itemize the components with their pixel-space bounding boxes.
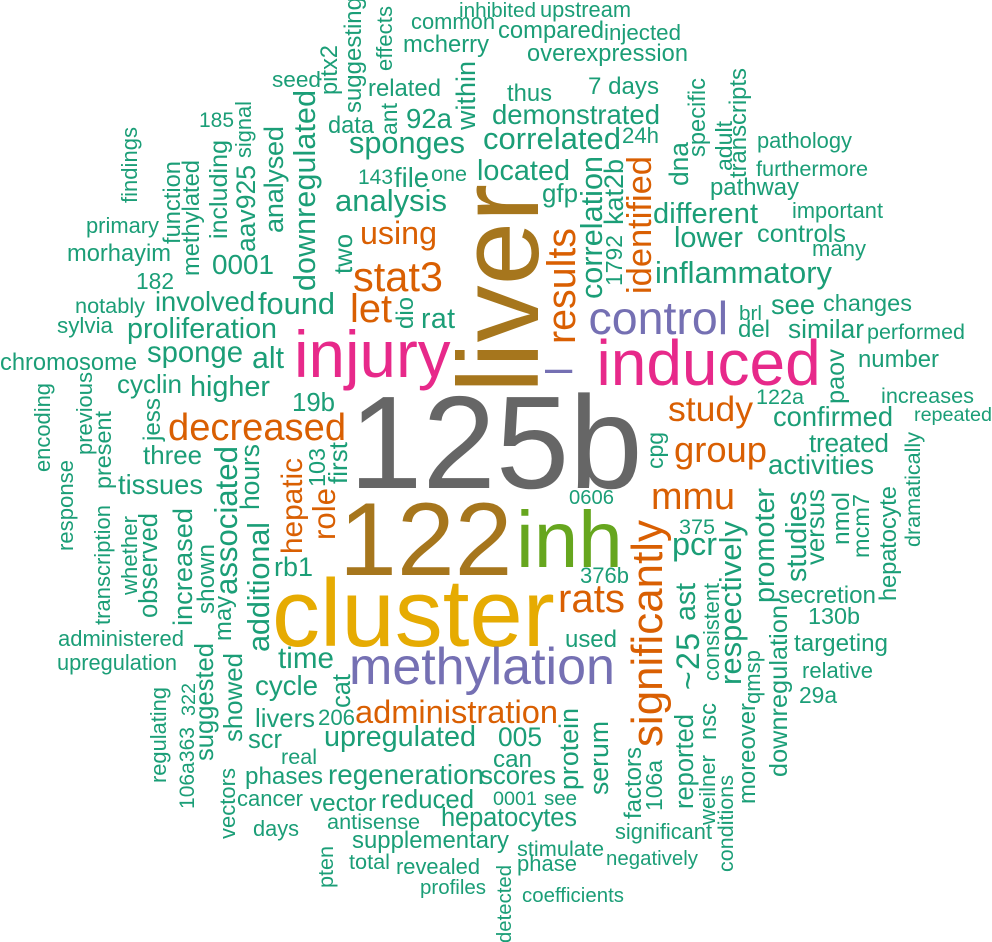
vertical green terms: right side: 1792 [601,235,627,286]
vertical green terms: left side: effects [372,6,397,71]
green terms: lower left: 206 [318,705,355,730]
vertical green terms: left side: whether [117,515,142,596]
vertical green terms: left side: observed [135,513,163,618]
vertical green terms: right side: adult [711,120,737,171]
green terms: upper left: common [411,9,495,34]
green terms: upper right: changes [823,290,912,316]
green terms: lower right: negatively [606,848,699,870]
vertical green terms: right side: transcripts [725,68,752,178]
green terms: upper right: gfp [542,180,578,208]
green terms: lower right: phase [517,851,577,876]
green terms: lower left: upregulation [57,650,177,675]
word: decreased: decreased [168,407,346,449]
word: using: using [360,215,437,251]
green terms: upper left: rat [421,303,455,335]
green terms: upper left: sponge [147,336,243,369]
green terms: upper right: 7 days [588,73,659,100]
green terms: lower right: see [544,787,577,810]
green terms: upper right: 24h [622,123,659,148]
green terms: lower right: 005 [498,722,542,752]
green terms: lower right: targeting [794,630,888,657]
green terms: lower left: administered [58,626,184,651]
green terms: lower left: cycle [255,670,318,701]
vertical green terms: left side: downregulated [288,90,322,291]
green terms: upper left: notably [75,293,145,318]
vertical green terms: left side: two [330,234,358,274]
green terms: upper left: seed [272,67,321,92]
vertical green terms: left side [30,0,481,888]
vertical green terms: left side: jess [139,398,166,442]
green terms: lower right: 130b [808,603,860,629]
green terms: upper left [0,9,495,500]
green terms: upper left: 92a [406,103,453,134]
green terms: lower right: 0001 [493,788,537,810]
green terms: upper right: controls [757,220,846,248]
vertical green terms: left side: function [160,161,186,244]
green terms: upper right: confirmed [773,401,893,432]
vertical green terms: right side: factors [620,747,647,819]
green terms: upper left: 19b [292,389,335,417]
green terms: upper right: located [477,155,570,187]
green terms: upper left: found [258,286,335,321]
vertical green terms: right side: dna [664,142,694,186]
word: role: role [307,488,342,540]
green terms: upper right: lower [674,222,743,254]
vertical green terms: left side: signal [231,101,256,158]
green terms: lower left: regeneration [328,759,484,790]
green terms: upper left: file [394,162,429,193]
green terms: upper right: activities [768,449,874,480]
green terms: lower right [441,487,888,907]
green terms: lower left: reduced [381,786,474,814]
vertical green terms: left side: cat [328,674,356,708]
green terms: upper right: thus [507,80,552,107]
word: identified: identified [621,156,659,294]
green terms: upper right: compared [498,17,604,44]
green terms: upper right: pathway [710,174,799,201]
green terms: lower left: cancer [237,786,303,811]
vertical green terms: right side: protein [554,708,584,790]
green terms: lower left: livers [255,705,315,733]
vertical green terms: right side: detected [494,865,516,942]
vertical green terms: right side: hepatocyte [875,486,902,601]
green terms: upper right: overexpression [527,41,688,67]
word: dash: – [545,341,573,395]
word: injury: injury [294,318,451,391]
green terms: upper right: furthermore [756,156,868,181]
vertical green terms: left side: 103 [304,448,330,487]
green terms: upper right: injected [604,20,681,45]
green terms: upper left: 182 [136,268,174,294]
vertical green terms: right side: moreover [734,703,761,804]
vertical green terms: right side: paov [822,349,850,404]
green terms: upper left: alt [252,342,285,375]
vertical green terms: right side: nmol [828,492,855,545]
vertical green terms: left side: present [90,410,116,489]
green terms: upper left: data [328,113,375,139]
green terms: upper left: 0001 [212,249,274,280]
green terms: upper right: different [653,198,758,230]
green terms: upper left: primary [86,213,159,238]
green terms: upper right: performed [867,320,965,344]
vertical green terms: left side: associated [209,446,244,595]
vertical green terms: right side: weilner [695,755,720,826]
vertical green terms: left side: suggested [191,643,219,761]
vertical green terms: left side: analysed [258,126,289,233]
green terms: upper right: similar [788,314,864,344]
word: stat3: stat3 [353,253,443,300]
vertical green terms: left side: methylated [179,160,205,276]
green terms: upper right: repeated [914,404,992,426]
vertical green terms: left side: showed [220,653,248,742]
vertical green terms: left side: may [210,596,237,641]
vertical green terms: right side: studies [781,491,813,582]
vertical green terms: right side: downregulation [765,605,793,777]
green terms: upper right: many [812,236,866,261]
green terms: lower left: revealed [396,854,480,879]
vertical green terms: left side: regulating [146,687,171,783]
green terms: lower left: total [349,849,390,874]
vertical green terms: left side: aav925 [231,165,261,252]
green terms: upper left: 143 [358,166,393,189]
word: results: results [540,228,584,344]
green terms: lower left: phases [245,763,323,790]
vertical green terms: left side: response [53,460,78,551]
green terms: upper left: higher [190,371,270,403]
green terms: upper right: important [792,198,883,223]
vertical green terms: right side: consistent [699,583,724,681]
vertical green terms: right side: correlation [575,156,609,299]
vertical green terms: right side: dramatically [900,432,925,547]
vertical green terms: right side: ~25 [670,633,706,690]
vertical green terms: right side: promoter [749,488,781,603]
vertical green terms: right side: reported [671,714,699,809]
vertical green terms: left side: within [451,61,481,131]
word: control: control [588,292,728,344]
green terms: lower right: used [565,626,617,653]
green terms: upper left: tissues [118,469,203,500]
vertical green terms: left side: findings [117,127,142,203]
green terms: lower left: upregulated [324,721,476,753]
green terms: upper left: chromosome [0,350,137,376]
vertical green terms: left side: pitx2 [317,45,343,95]
green terms: lower left: supplementary [352,827,509,854]
green terms: upper right: brl [739,302,762,325]
green terms: upper right [459,0,992,480]
green terms: lower left: scr [248,726,282,754]
green terms: upper right: correlated [483,121,621,156]
word: liver: liver [436,184,563,393]
green terms: lower right: significant [615,819,712,844]
green terms: lower left: rb1 [274,552,313,582]
vertical green terms: left side: transcription [90,505,115,625]
vertical green terms: left side: increased [167,508,198,626]
word: methylation: methylation [349,638,615,696]
green terms: upper right: increases [881,383,974,408]
green terms: lower right: 29a [799,682,837,708]
vertical green terms: left side: additional [241,522,276,652]
vertical green terms: left side: 106a363 [176,727,199,809]
green terms: upper right: pathology [757,128,852,153]
green terms: lower left: real [281,744,317,769]
vertical green terms: right side: qmsp [740,650,765,704]
word: cluster: cluster [272,560,555,667]
word: let: let [350,287,392,331]
green terms: upper left: cyclin [117,369,182,399]
vertical green terms: right side: specific [685,78,711,157]
green terms: lower right: hepatocytes [441,804,577,832]
vertical green terms: right side: ast [670,583,702,621]
green terms: upper right: 122a [756,384,805,409]
vertical green terms: right side: serum [584,721,614,795]
vertical green terms: left side: hours [235,444,265,510]
vertical green terms: left side: including [205,140,233,239]
green terms: lower right: can [493,746,532,773]
green terms: upper right: number [858,346,939,373]
vertical green terms: right side: cpg [642,432,668,469]
vertical green terms: right side: 106a [641,760,667,811]
vertical green terms: left side: first [323,441,353,484]
word: rats: rats [558,576,625,621]
vertical green terms: left side: encoding [30,383,55,472]
green terms: upper right: demonstrated [492,99,660,130]
green terms: upper left: three [143,442,202,470]
vertical green terms: left side: pten [313,846,338,888]
word: 125b: 125b [349,369,643,516]
green terms: lower left: antisense [327,809,420,834]
green terms: upper left: proliferation [127,313,277,345]
word: study: study [668,389,753,429]
vertical green terms: right side: respectively [713,520,748,685]
word: mmu: mmu [651,476,735,518]
green terms: lower right: 376b [580,563,629,588]
green terms: upper left: morhayim [67,241,171,267]
green terms: upper right: see [771,289,815,320]
vertical green terms: left side: 322 [178,683,200,716]
word: group: group [674,429,767,470]
green terms: lower right: secretion [778,582,876,609]
word: hepatic: hepatic [276,458,309,554]
word: significantly: significantly [623,520,672,747]
vertical green terms: right side: versus [802,489,830,565]
vertical green terms: right side: nsc [695,703,722,740]
word: induced: induced [596,327,821,399]
green terms: lower right: relative [802,658,873,683]
green terms: upper left: one [431,161,467,186]
green terms: lower right: scores [480,762,556,790]
word: inh: inh [516,495,623,584]
vertical green terms: right side: conditions [714,775,738,872]
vertical green terms: left side: previous [72,372,97,455]
vertical green terms: left side: shown [193,544,220,614]
vertical green terms: left side: suggesting [340,0,367,113]
vertical green terms: right side [494,68,925,942]
green terms: lower left: vector [310,790,376,817]
vertical green terms: left side: vectors [215,768,240,839]
vertical green terms: right side: kat2b [599,159,629,225]
green terms: lower left [57,552,509,899]
orange terms [168,156,767,747]
green terms: lower right: 0606 [569,487,614,509]
green terms: upper left: related [368,75,441,102]
green terms: upper left: sylvia [57,313,114,338]
green terms: lower right: coefficients [522,885,624,907]
vertical green terms: right side: mcm7 [848,494,874,558]
green terms: upper left: involved [155,286,255,317]
green terms: upper right: del [738,316,770,343]
vertical green terms: left side: ant [376,102,402,135]
green terms: lower right: stimulate [517,836,604,861]
green terms: upper right: treated [809,428,889,458]
green terms: lower left: profiles [420,876,486,899]
green terms: lower left: time [278,642,334,675]
green terms: upper left: analysis [335,183,447,218]
green terms: upper right: inflammatory [655,255,833,290]
green terms: lower right: pcr [672,526,717,562]
word: administration: administration [355,693,558,730]
green terms: upper left: mcherry [403,31,489,58]
vertical green terms: left side: dio [392,297,419,329]
green terms: upper left: sponges [349,125,465,160]
green terms: lower left: days [253,816,299,841]
word: 122: 122 [339,482,513,598]
green terms: lower right: 375 [679,514,715,539]
green terms: upper left: 185 [199,109,234,132]
